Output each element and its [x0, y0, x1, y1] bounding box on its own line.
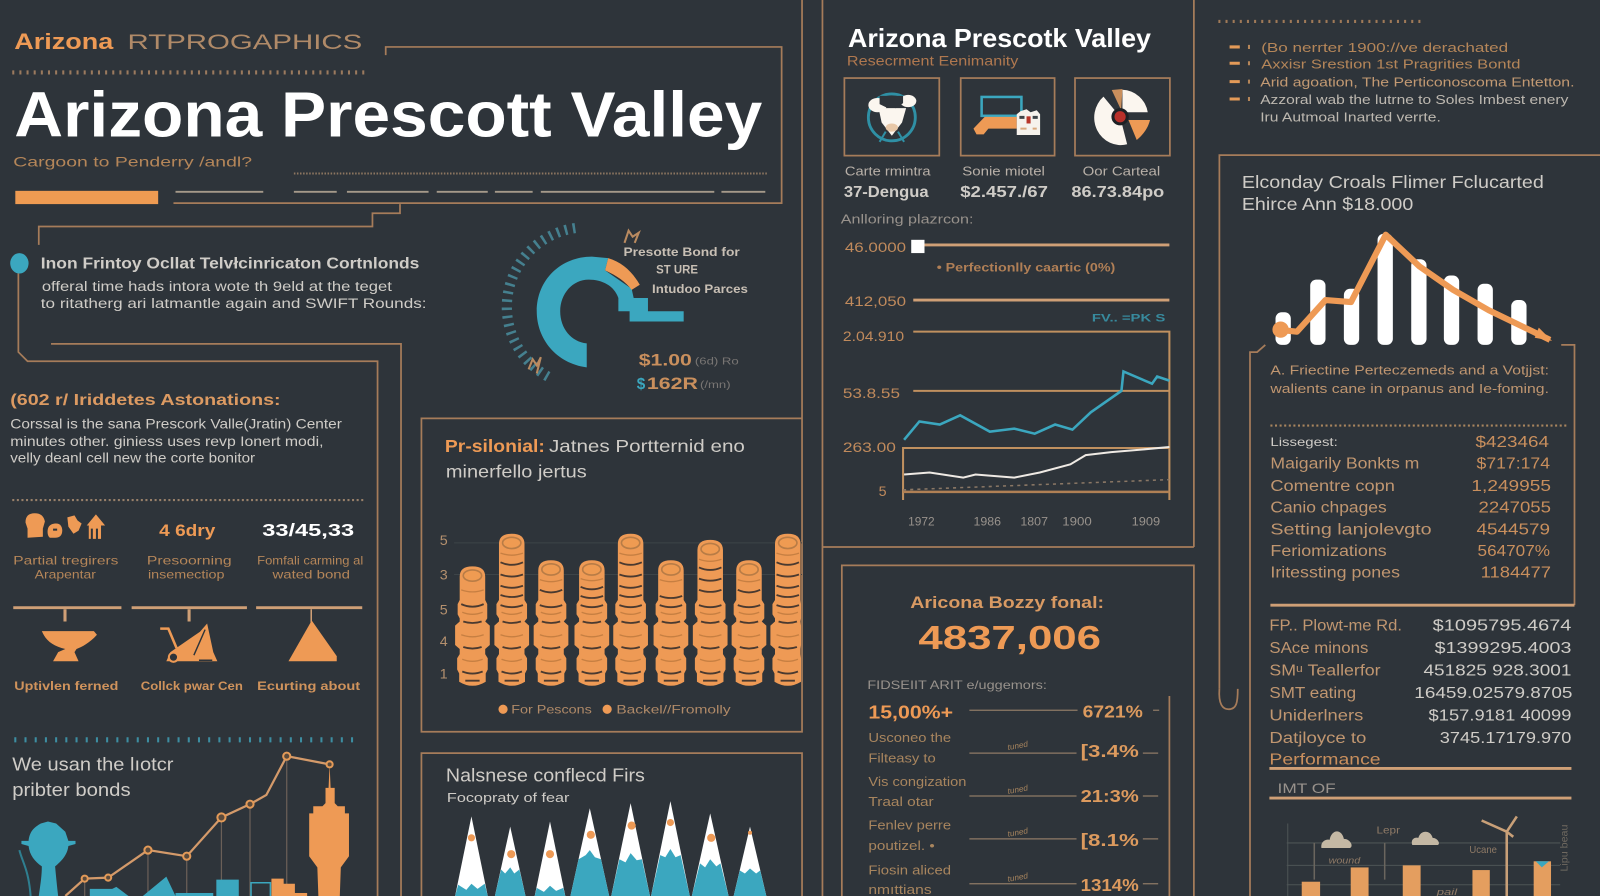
table 1: Lissegest: [1270, 435, 1338, 449]
line chart: 5 [879, 484, 887, 500]
icon box values: 86.73.84po [1071, 184, 1164, 201]
gauge chart: ST URE [656, 262, 698, 276]
y axis labels: 5 [440, 602, 448, 618]
table 2: 3745.17179.970 [1440, 730, 1571, 747]
panel: right column [1242, 172, 1574, 896]
stat labels: insemectiop [148, 568, 225, 582]
bullet list: (Bo nerrter 1900://ve derachated [1261, 40, 1508, 55]
icon box values: $2.457./67 [960, 184, 1048, 201]
table 2: $157.9181 40099 [1429, 707, 1571, 724]
row 3: tuned [1007, 783, 1029, 796]
table 1: Maigarily Bonkts m [1270, 455, 1419, 472]
table 1: 2247055 [1479, 499, 1551, 516]
table 2: 16459.02579.8705 [1414, 685, 1572, 702]
panel subtitle: Resecrment Eenimanity [847, 53, 1019, 69]
header brand line: Arizona [14, 29, 114, 54]
subtitle: Cargoon to Penderry /andl? [13, 154, 253, 169]
icon box labels: Oor Carteal [1083, 164, 1160, 179]
gauge chart: (6d) Ro [695, 356, 739, 367]
y axis labels: 4 [440, 634, 448, 650]
orange accent bar [15, 191, 158, 204]
row 2: [3.4% [1081, 741, 1139, 761]
table footer label: IMT OF [1278, 781, 1336, 797]
icon captions [14, 679, 360, 693]
row 1: 6721% [1083, 701, 1143, 721]
bar and line chart [1272, 234, 1552, 345]
stat labels: Partial tregirers [13, 553, 118, 567]
list caption: FIDSEIIT ARIT e/uggemors: [867, 678, 1047, 692]
table 1: 1184477 [1481, 565, 1551, 582]
table 1: $717:174 [1477, 455, 1551, 472]
stack 9 [770, 534, 801, 686]
icon box labels [845, 164, 1160, 179]
stack 5 [613, 534, 648, 686]
table 2: SMT eating [1269, 685, 1356, 702]
line chart: • Perfectionlly caartic (0%) [937, 260, 1115, 274]
chart heading: Jatnes Portternid eno [549, 436, 745, 456]
section heading: (602 r/ Iriddetes Astonations: [10, 392, 281, 409]
stack 4 [574, 560, 609, 686]
bullet list: Azzoral wab the lutrne to Soles Imbest enery [1260, 92, 1569, 107]
line chart [843, 240, 1169, 529]
icon box 3 [1075, 78, 1170, 156]
y axis labels: 1 [440, 667, 448, 683]
intro text block: Inon Frintoy Ocllat Telvłcinricaton Cortnlonds [41, 255, 419, 272]
stack 7 [693, 540, 728, 686]
section body: minutes other. giniess uses revp Ionert modi, [10, 434, 323, 449]
table 2: FP.. Plowt-me Rd. [1269, 618, 1402, 635]
y axis labels [440, 533, 448, 683]
line chart: 1909 [1132, 515, 1160, 529]
row 4: poutizel. • [868, 838, 935, 853]
table 2: SAce minons [1269, 640, 1369, 657]
line chart: 1900 [1062, 515, 1092, 529]
title: Arizona Prescott Valley [14, 79, 763, 151]
header brand line: RTPROGAPHICS [128, 30, 362, 54]
panel title: Arizona Prescotk Valley [848, 25, 1152, 53]
table 1: $423464 [1476, 434, 1550, 451]
gauge chart: 162R [647, 375, 698, 393]
icon: people group [26, 513, 105, 539]
section body: velly deanl cell new the corte bonitor [10, 450, 256, 465]
intro text block: to ritatherg ari latmantle again and SWIFT Rounds: [41, 296, 427, 312]
stack 8 [732, 560, 766, 686]
stat heading: Aricona Bozzy fonal: [910, 594, 1104, 612]
table 1: Setting lanjolevgto [1270, 522, 1432, 539]
bullet list: Axxisr Srestion 1st Pragrities Bontd [1261, 56, 1520, 71]
mountain heading: Nalsnese conflecd Firs [446, 765, 645, 786]
right heading: Ehirce Ann $18.000 [1242, 194, 1413, 214]
stat labels: Arapentar [35, 568, 96, 582]
panel: left info [10, 392, 363, 693]
icon captions: Ecurting about [257, 679, 360, 693]
table 1: Feriomizations [1270, 543, 1387, 560]
chart note [1269, 363, 1549, 396]
bottom energy chart: Lipu beau [1559, 825, 1570, 872]
row 3: Vis congization [868, 774, 966, 789]
line chart caption: Anlloring plazrcon: [841, 211, 973, 226]
table 1: Iritessting pones [1270, 565, 1400, 582]
row 4: [8.1% [1081, 830, 1139, 850]
row 5: tuned [1007, 871, 1029, 884]
bottom-left heading: We usan the lıotcr [12, 753, 173, 774]
icon box labels: Carte rmintra [845, 164, 931, 179]
gauge chart: (/mn) [700, 380, 731, 391]
table 2: Uniderlners [1269, 707, 1364, 724]
chart legend: For Pescons [511, 702, 592, 716]
row 4: tuned [1007, 826, 1029, 839]
stat values: 4 6dry [159, 522, 215, 540]
icon: bowl [42, 631, 97, 661]
stack 2 [494, 534, 529, 686]
icon: orange tower [309, 764, 349, 896]
table 2: Performance [1269, 751, 1381, 768]
stat labels: Fomfali carming al [257, 553, 363, 567]
table 1: 564707% [1478, 543, 1550, 560]
panel: middle bottom stats [867, 594, 1169, 896]
panel: middle top [841, 25, 1170, 529]
table 1: Comentre copn [1270, 478, 1395, 495]
chart note: walients cane in orpanus and Ie-foming. [1269, 381, 1549, 396]
gauge chart: Intudoo Parces [652, 282, 748, 296]
mountain heading [446, 765, 645, 805]
icon box 2 [961, 78, 1055, 156]
chart legend [498, 702, 732, 716]
gauge chart: $1.00 [639, 351, 692, 369]
table 1 [1270, 434, 1551, 582]
table 2: 451825 928.3001 [1423, 663, 1571, 680]
row 5 [868, 863, 1158, 896]
header brand line [14, 29, 362, 54]
chart heading: Pr-silonial: [445, 436, 545, 456]
stack 1 [455, 566, 490, 686]
table 2: $1095795.4674 [1433, 618, 1572, 635]
line chart: 1972 [908, 515, 935, 529]
table 2 [1269, 618, 1572, 768]
city growth chart [19, 753, 349, 896]
row 2: tuned [1007, 740, 1029, 752]
table 2: Datjloyce to [1269, 730, 1366, 747]
icon captions: Uptivlen ferned [14, 679, 118, 693]
mountain heading: Focopraty of fear [447, 790, 570, 805]
bottom energy chart: Lepr [1377, 826, 1401, 837]
row 4: Fenlev perre [868, 818, 951, 833]
table 1: 1,249955 [1471, 478, 1551, 495]
row 4 [868, 818, 1158, 853]
stat values: 33/45,33 [262, 520, 355, 540]
line chart: 1986 [973, 515, 1001, 529]
row 2: Filteasy to [868, 750, 936, 765]
line chart: 412,050 [845, 294, 906, 310]
gauge chart: $ [637, 376, 646, 393]
table 2: $1399295.4003 [1435, 640, 1571, 657]
stat values [159, 520, 355, 540]
panel: mountain chart [446, 765, 766, 896]
chart note: A. Friectine Perteczemeds and a Votjjst: [1270, 363, 1549, 378]
row 3 [868, 774, 1158, 809]
right heading [1242, 172, 1544, 214]
bottom-left heading: pribter bonds [12, 779, 131, 800]
line chart: 263.00 [843, 440, 896, 456]
row 5: 1314% [1081, 875, 1139, 895]
gauge chart: Presotte Bond for [623, 245, 740, 259]
big number: 4837,006 [918, 620, 1101, 657]
right heading: Elconday Croals Flimer Fclucarted [1242, 172, 1544, 192]
bottom energy chart: Ucane [1469, 845, 1497, 856]
icon: chair [160, 624, 217, 662]
snow peaks [455, 801, 766, 896]
chart legend: Backel//Fromolly [616, 702, 732, 716]
line chart: 46.0000 [845, 240, 906, 256]
line chart: 53.8.55 [843, 386, 900, 402]
icon box labels: Sonie miotel [962, 164, 1045, 179]
icon: triangle tent [288, 620, 337, 661]
row 1 [868, 701, 1159, 722]
table 1: Canio chpages [1270, 499, 1387, 516]
table 1: 4544579 [1477, 522, 1550, 539]
bottom energy chart: wound [1329, 855, 1361, 865]
line chart: FV.. =PK S [1092, 312, 1166, 324]
row 2: Usconeo the [868, 730, 951, 745]
teal marker dot [10, 253, 29, 273]
y axis labels: 3 [440, 568, 448, 584]
icon captions: Collck pwar Cen [141, 679, 243, 693]
bottom energy chart [1287, 816, 1570, 896]
stat labels: Presoorning [147, 553, 232, 567]
line chart: 2.04.910 [843, 329, 904, 345]
row 3: 21:3% [1081, 786, 1139, 806]
intro text block: offeral time hads intora wote th 9eld at the teget [42, 279, 392, 295]
peak markers [468, 819, 752, 858]
panel: coin stacks chart [440, 436, 802, 716]
row 2 [868, 730, 1158, 765]
stat labels [13, 553, 363, 582]
row 3: Traal otar [868, 794, 934, 809]
line chart: 1807 [1020, 515, 1048, 529]
section body [10, 417, 342, 465]
icon box values: 37-Dengua [844, 184, 929, 201]
row 5: Fiosin aliced [868, 863, 951, 878]
bullet list: Iru Autmoal Inarted verrte. [1260, 109, 1441, 124]
section body: Corssal is the sana Prescork Valle(Jratin) Center [10, 417, 342, 432]
bullet list [1230, 40, 1574, 124]
icon box values [844, 184, 1164, 201]
y axis labels: 5 [440, 533, 448, 549]
row 1: 15,00%+ [868, 701, 953, 722]
chart heading [445, 436, 745, 482]
intro text block [41, 255, 427, 312]
stack 6 [654, 560, 688, 686]
table 2: SMᵘ Teallerfor [1269, 663, 1381, 680]
chart heading: minerfello jertus [446, 462, 587, 482]
stat labels: wated bond [271, 568, 350, 582]
teal mountain bases [455, 849, 766, 896]
bottom-left heading [12, 753, 173, 800]
stack 3 [534, 560, 568, 686]
bullet list: Arid agoation, The Perticonoscoma Entetton. [1260, 75, 1574, 90]
icon box 1 [844, 78, 939, 156]
icon: teal tree [19, 822, 76, 896]
gauge chart [507, 228, 748, 393]
